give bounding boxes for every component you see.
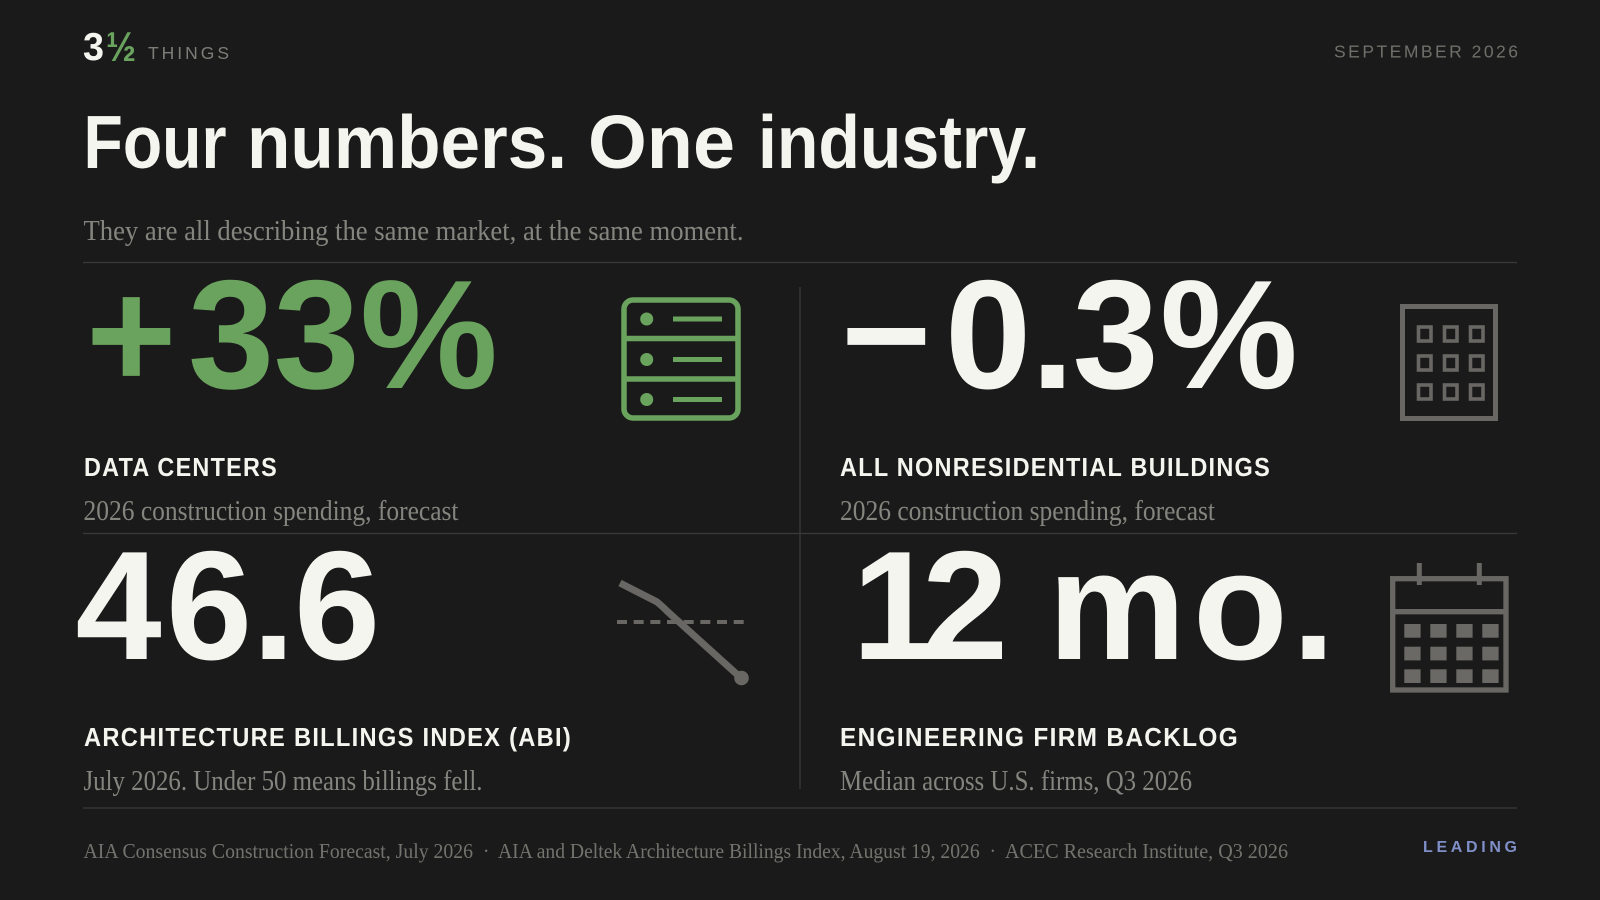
logo: 3½ things: ½ [106,23,136,70]
description: Median across U.S. firms, Q3 2026 [840,766,1192,797]
label: nonresidential: ALL NONRESIDENTIAL BUILDINGS [840,452,1271,482]
icon: calendar [1393,563,1506,690]
description: July 2026. Under 50 means billings fell. [84,766,482,797]
panel: architecture billings index [76,519,749,797]
tag: leading: LEADING [1423,839,1517,856]
panel: nonresidential buildings [840,248,1496,527]
sources footer [84,839,1288,863]
title [84,100,1040,184]
title: Four [84,100,226,184]
sources footer: AIA and Deltek Architecture Billings Index, August 19, 2026 · [498,839,996,863]
label: backlog: ENGINEERING FIRM BACKLOG [840,722,1239,752]
label: ABI: ARCHITECTURE BILLINGS INDEX (ABI) [84,722,572,752]
description: 2026 construction spending, forecast [840,496,1215,527]
title: One [588,100,735,184]
logo: 3½ things: 3 [83,26,104,69]
title: numbers. [247,100,567,184]
logo: 3½ things [83,23,229,70]
icon: server rack [624,300,738,418]
logo: 3½ things: THINGS [148,43,229,63]
icon: falling trend line [617,583,749,685]
description: 2026 construction spending, forecast [84,496,459,527]
title: industry. [758,100,1040,184]
stat: +33%: +33% [86,248,498,421]
label: data centers: DATA CENTERS [84,452,278,482]
stat: -0.3%: −0.3% [841,248,1298,421]
panel: data centers [84,248,738,527]
stat: 12 mo.: 12 mo. [852,519,1335,692]
stat: 46.6: 46.6 [76,519,380,692]
date: SEPTEMBER 2026 [1334,42,1518,62]
sources footer: AIA Consensus Construction Forecast, July 2026 · [84,839,490,863]
subtitle: They are all describing the same market, at the same moment. [84,215,744,247]
icon: office building [1402,306,1496,418]
sources footer: ACEC Research Institute, Q3 2026 [1005,839,1288,863]
panel: engineering backlog [840,519,1506,797]
